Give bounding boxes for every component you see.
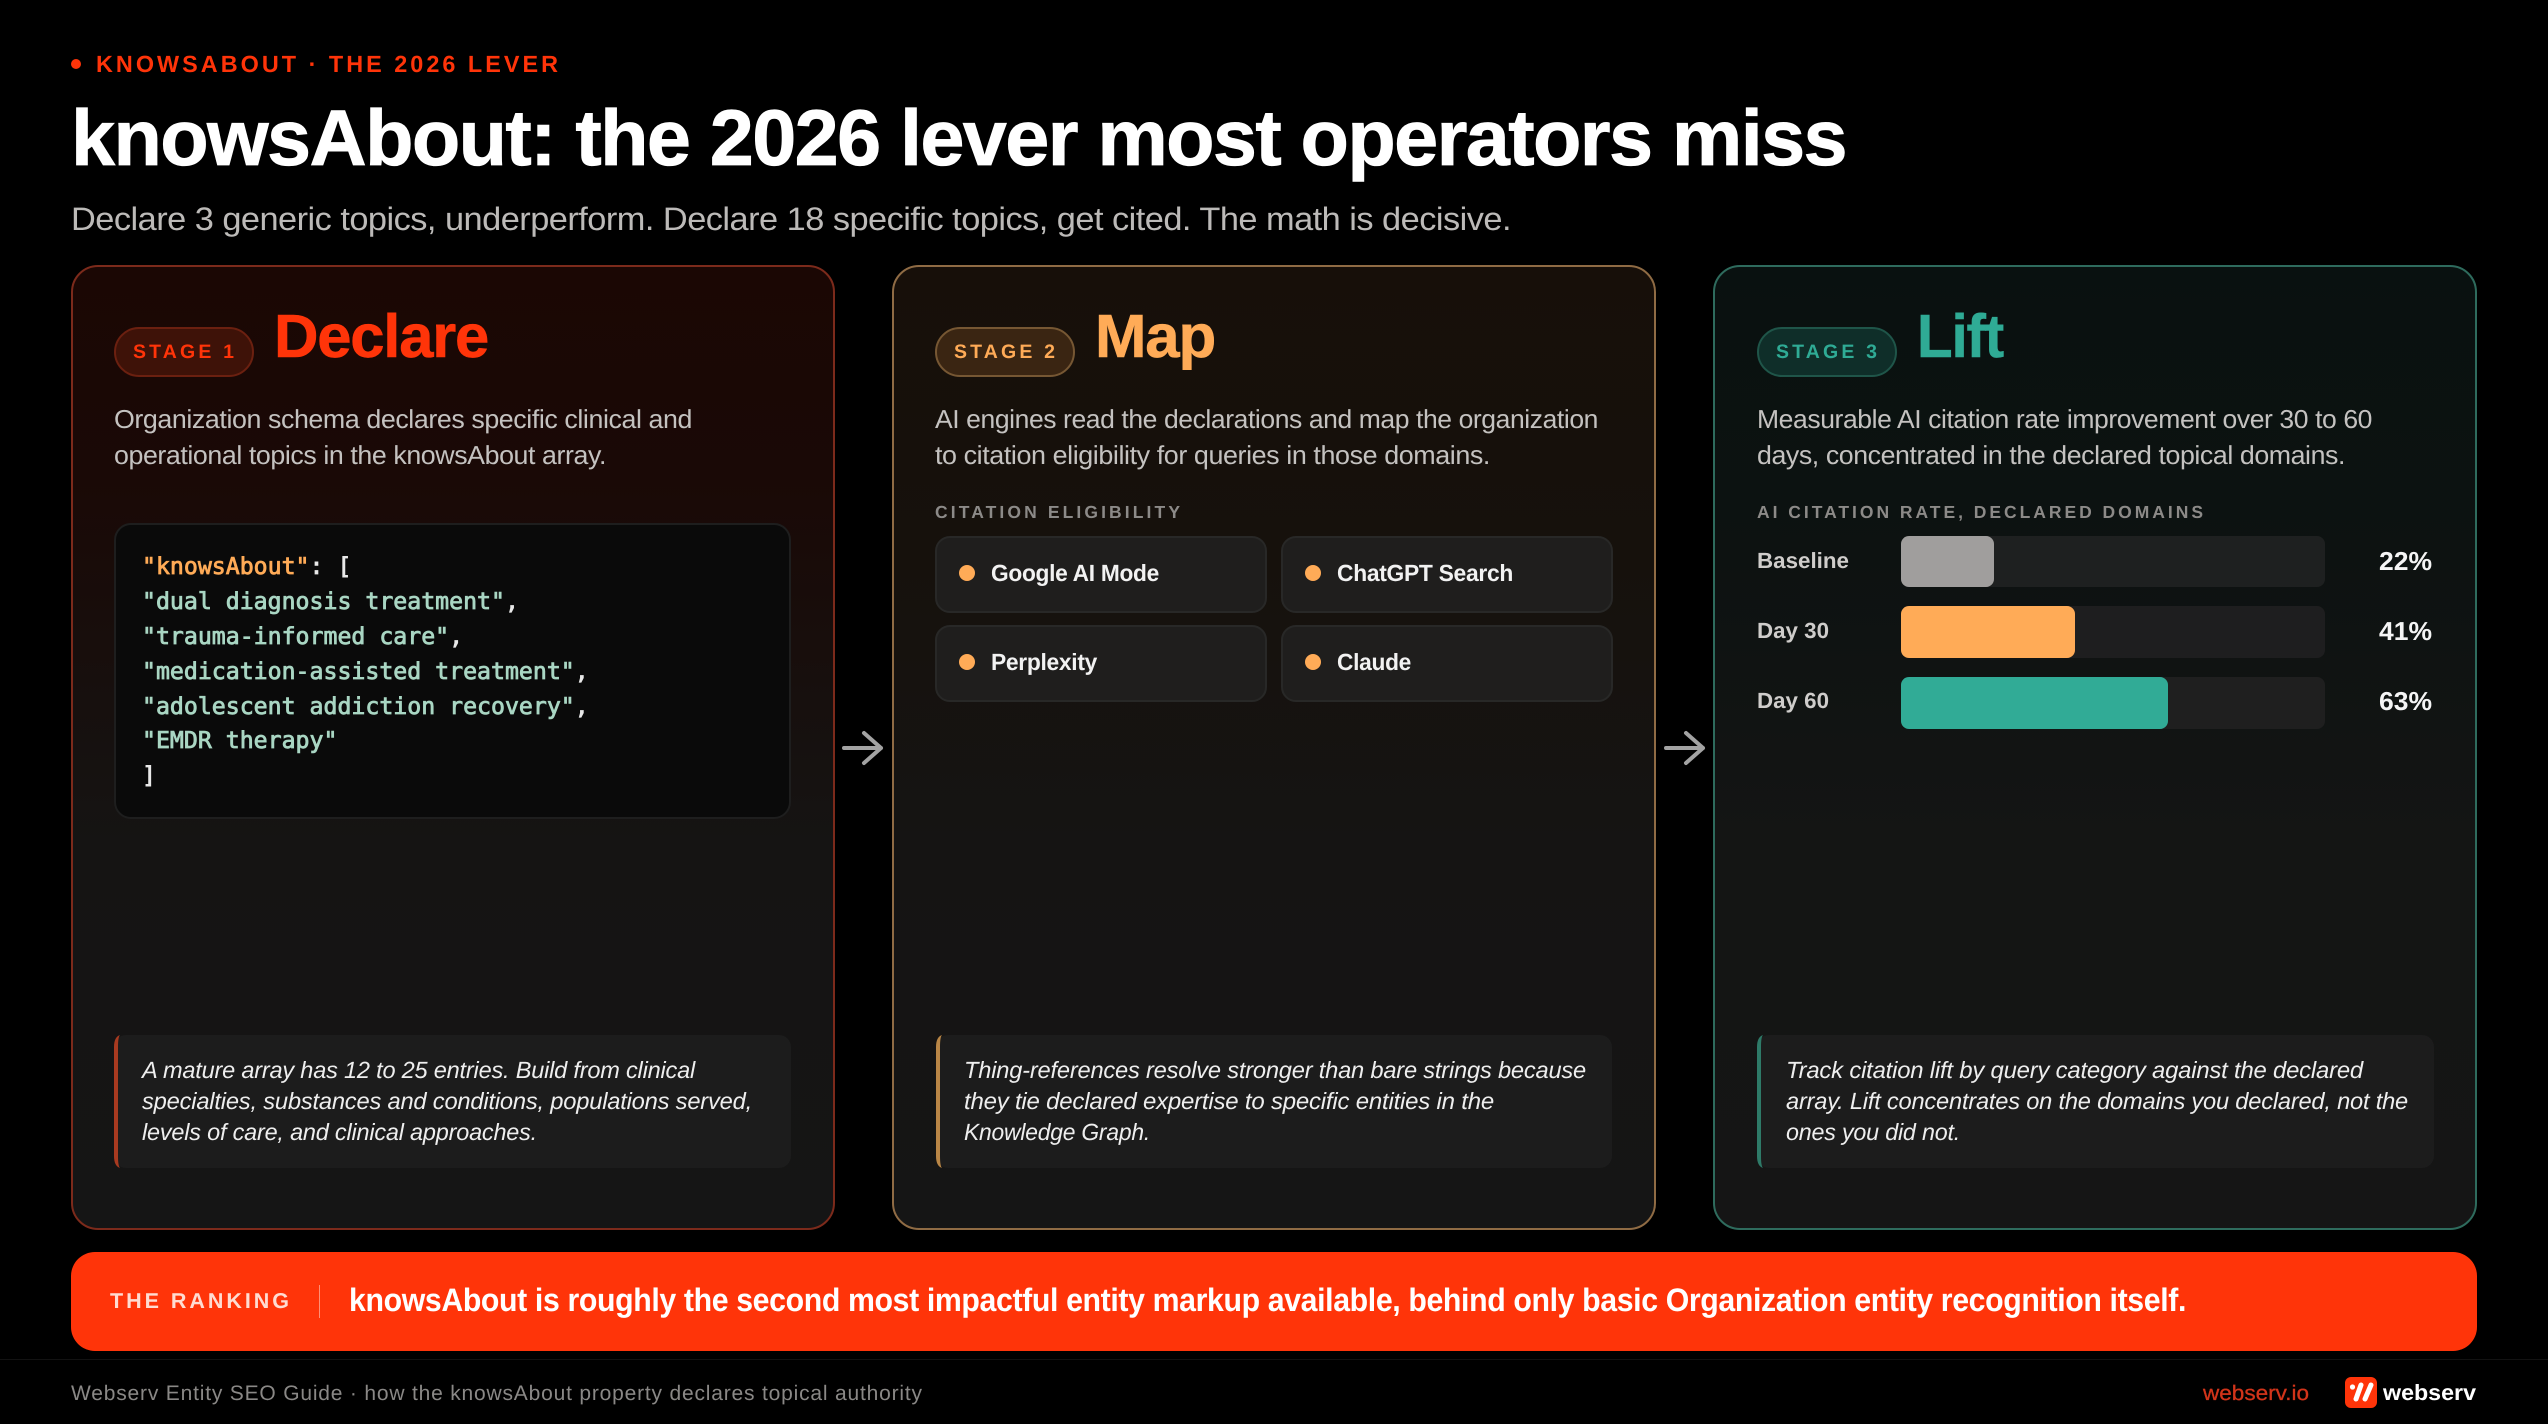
bar: baseline 22%: 22%: [2379, 546, 2432, 576]
stage 3 badge: STAGE 3: [1776, 341, 1877, 363]
description: map: to citation eligibility for queries in those domains.: [935, 440, 1490, 470]
chip: chatgpt search: ChatGPT Search: [1337, 560, 1513, 586]
callout: map note: they tie declared expertise to specific entities in the: [964, 1088, 1494, 1114]
bar: day 60 63%: Day 60: [1757, 688, 1829, 713]
code block: knowsAbout array: "adolescent addiction recovery",: [142, 693, 589, 720]
bar: day 30 41%: Day 30: [1757, 618, 1829, 643]
panel: stage 2 map: [893, 266, 1655, 1229]
chip: claude: Claude: [1337, 649, 1411, 675]
callout: declare note: specialties, substances and conditions, populations served,: [142, 1088, 752, 1114]
callout: declare note: A mature array has 12 to 25 entries. Build from clinical: [140, 1057, 696, 1083]
chip: chatgpt search: [1282, 537, 1612, 612]
banner: the ranking: THE RANKING: [110, 1289, 289, 1313]
heading: declare: Declare: [274, 302, 488, 370]
callout: lift note: array. Lift concentrates on the domains you declared, not the: [1786, 1088, 2408, 1114]
code block: knowsAbout array: "medication-assisted treatment",: [142, 658, 589, 685]
callout: declare note: [114, 1035, 791, 1168]
description: map: [935, 404, 1598, 470]
code block: knowsAbout array: ]: [142, 762, 156, 789]
arrow: map to lift: [1666, 733, 1703, 763]
description: declare: [114, 404, 692, 470]
stage 3 badge: [1758, 328, 1896, 376]
footer: source: Webserv Entity SEO Guide · how the knowsAbout property declares topical authority: [71, 1382, 922, 1405]
panel: stage 3 lift: [1714, 266, 2476, 1229]
code block: knowsAbout array: "dual diagnosis treatment",: [142, 588, 519, 615]
heading: map: Map: [1095, 302, 1215, 370]
chip: perplexity: Perplexity: [991, 649, 1097, 675]
title: knowsAbout: the 2026 lever most operators miss: [71, 93, 1846, 182]
callout: lift note: [1757, 1035, 2434, 1168]
callout: map note: Thing-references resolve stronger than bare strings because: [964, 1057, 1586, 1083]
eyebrow: KNOWSABOUT · THE 2026 LEVER: [96, 51, 558, 77]
banner: the ranking: [71, 1252, 2477, 1351]
logo: webserv: webserv: [2382, 1380, 2477, 1405]
chip: claude: [1282, 626, 1612, 701]
stage 1 badge: STAGE 1: [133, 341, 234, 363]
bar: baseline 22%: [1757, 536, 2432, 587]
code block: knowsAbout array: [115, 524, 790, 818]
bar chart: citation rate: [1757, 536, 2432, 729]
callout: lift note: ones you did not.: [1786, 1119, 1960, 1145]
description: map: AI engines read the declarations and map the organization: [935, 404, 1598, 434]
bar: baseline 22%: Baseline: [1757, 548, 1849, 573]
chip: perplexity: [936, 626, 1266, 701]
logo: webserv: [2345, 1377, 2477, 1408]
footer: url: webserv.io: [2202, 1382, 2309, 1405]
description: lift: [1757, 404, 2372, 470]
arrow: declare to map: [844, 733, 881, 763]
chip: google ai mode: Google AI Mode: [991, 560, 1159, 586]
bar: day 60 63%: [1757, 677, 2432, 729]
callout: map note: Knowledge Graph.: [964, 1119, 1150, 1145]
subtitle: Declare 3 generic topics, underperform. Declare 18 specific topics, get cited. The math is decisive.: [71, 201, 1511, 237]
heading: lift: Lift: [1917, 302, 2004, 370]
label: citation eligibility: CITATION ELIGIBILITY: [935, 502, 1180, 522]
chip: google ai mode: [936, 537, 1266, 612]
stage 1 badge: [115, 328, 253, 376]
callout: map note: [936, 1035, 1612, 1168]
description: declare: operational topics in the knowsAbout array.: [114, 440, 606, 470]
panel: stage 1 declare: [72, 266, 834, 1229]
callout: lift note: Track citation lift by query category against the declared: [1786, 1057, 2364, 1083]
stage 2 badge: STAGE 2: [954, 341, 1055, 363]
callout: declare note: levels of care, and clinical approaches.: [142, 1119, 537, 1145]
code block: knowsAbout array: "trauma-informed care",: [142, 623, 463, 650]
description: lift: days, concentrated in the declared topical domains.: [1757, 440, 2345, 470]
description: lift: Measurable AI citation rate improvement over 30 to 60: [1757, 404, 2372, 434]
bar: day 60 63%: 63%: [2379, 686, 2432, 716]
stage 2 badge: [936, 328, 1074, 376]
bar: day 30 41%: [1757, 606, 2432, 658]
label: ai citation rate: AI CITATION RATE, DECLARED DOMAINS: [1757, 502, 2203, 522]
banner: the ranking: knowsAbout is roughly the second most impactful entity markup available, behind only basic Organization entity recognition itself.: [349, 1282, 2186, 1318]
code block: knowsAbout array: "EMDR therapy": [142, 727, 337, 754]
code block: knowsAbout array: "knowsAbout": [: [142, 553, 351, 580]
description: declare: Organization schema declares specific clinical and: [114, 404, 692, 434]
bar: day 30 41%: 41%: [2379, 616, 2432, 646]
